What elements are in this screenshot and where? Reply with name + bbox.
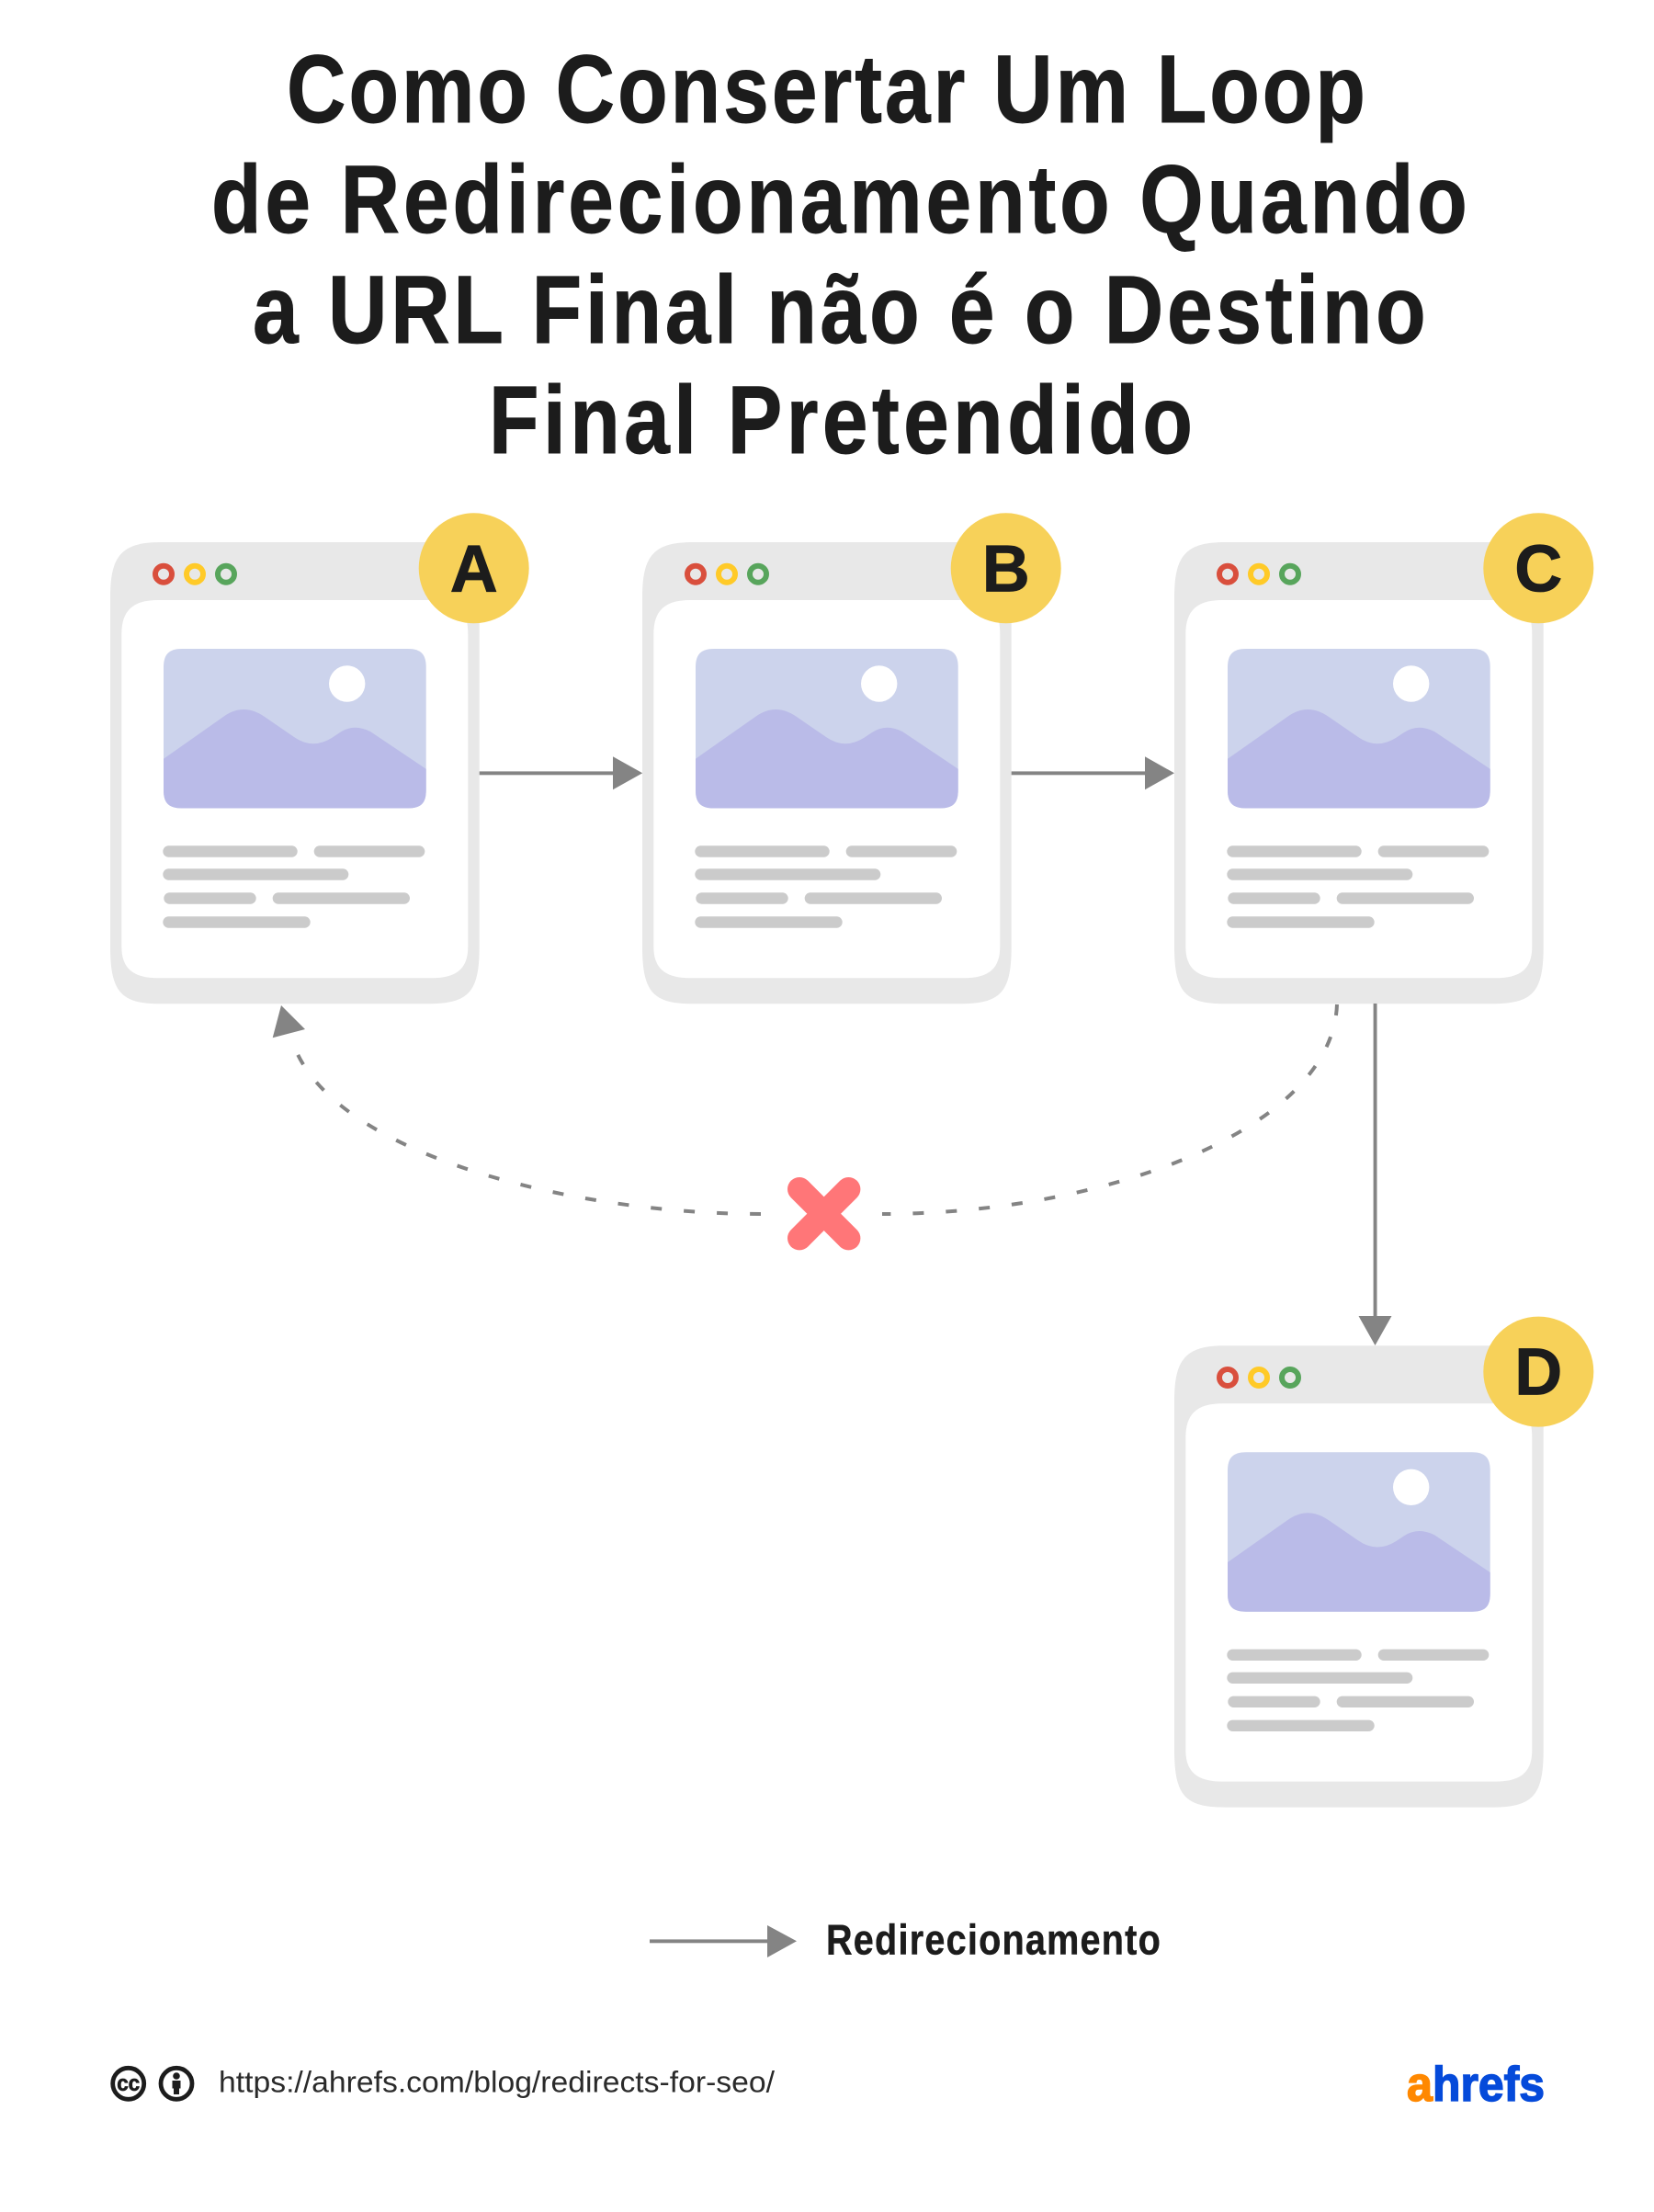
badge A bbox=[419, 513, 529, 623]
text placeholder lines bbox=[1227, 1650, 1489, 1731]
window frame bbox=[110, 542, 480, 1004]
window content area bbox=[121, 600, 468, 978]
badge D bbox=[1483, 1317, 1593, 1427]
window content area bbox=[1185, 600, 1532, 978]
image placeholder bbox=[164, 649, 426, 809]
browser window A bbox=[110, 513, 529, 1004]
browser dots bbox=[687, 566, 766, 583]
text placeholder lines bbox=[1227, 845, 1489, 928]
arrow C to D bbox=[1358, 1004, 1391, 1345]
browser dots bbox=[155, 566, 234, 583]
title bbox=[211, 35, 1467, 474]
text placeholder lines bbox=[163, 845, 425, 928]
window frame bbox=[642, 542, 1012, 1004]
image placeholder bbox=[696, 649, 958, 809]
icon: red cross bbox=[799, 1189, 848, 1238]
arrow A to B bbox=[480, 756, 642, 789]
title: de Redirecionamento Quando bbox=[211, 145, 1467, 254]
text placeholder lines bbox=[695, 845, 957, 928]
badge B bbox=[951, 513, 1061, 623]
badge C: C bbox=[1514, 532, 1562, 606]
title: a URL Final não é o Destino bbox=[253, 255, 1426, 364]
window content area bbox=[1185, 1403, 1532, 1782]
browser dots bbox=[1219, 566, 1298, 583]
window frame bbox=[1174, 542, 1544, 1004]
legend label: Redirecionamento bbox=[826, 1917, 1161, 1964]
badge B: B bbox=[982, 532, 1030, 606]
badge A: A bbox=[450, 532, 498, 606]
dashed arrow C back to A, blocked bbox=[273, 1004, 1337, 1214]
footer licence icons bbox=[113, 2068, 192, 2099]
legend arrow bbox=[650, 1925, 797, 1957]
icon: creative commons: cc bbox=[117, 2071, 140, 2096]
ahrefs logo: hrefs bbox=[1433, 2058, 1545, 2112]
browser window B bbox=[642, 513, 1061, 1004]
browser window C bbox=[1174, 513, 1593, 1004]
window content area bbox=[653, 600, 1000, 978]
browser dots bbox=[1219, 1369, 1298, 1386]
image placeholder bbox=[1228, 1452, 1490, 1612]
browser window D bbox=[1174, 1317, 1593, 1808]
title: Final Pretendido bbox=[489, 366, 1193, 474]
badge C bbox=[1483, 513, 1593, 623]
source url: https://ahrefs.com/blog/redirects-for-seo/ bbox=[219, 2066, 775, 2099]
legend bbox=[650, 1917, 1161, 1964]
window frame bbox=[1174, 1345, 1544, 1808]
icon: attribution bbox=[161, 2068, 192, 2099]
title: Como Consertar Um Loop bbox=[287, 35, 1365, 143]
arrow B to C bbox=[1012, 756, 1174, 789]
ahrefs logo: a bbox=[1407, 2058, 1433, 2112]
badge D: D bbox=[1514, 1336, 1562, 1410]
image placeholder bbox=[1228, 649, 1490, 809]
